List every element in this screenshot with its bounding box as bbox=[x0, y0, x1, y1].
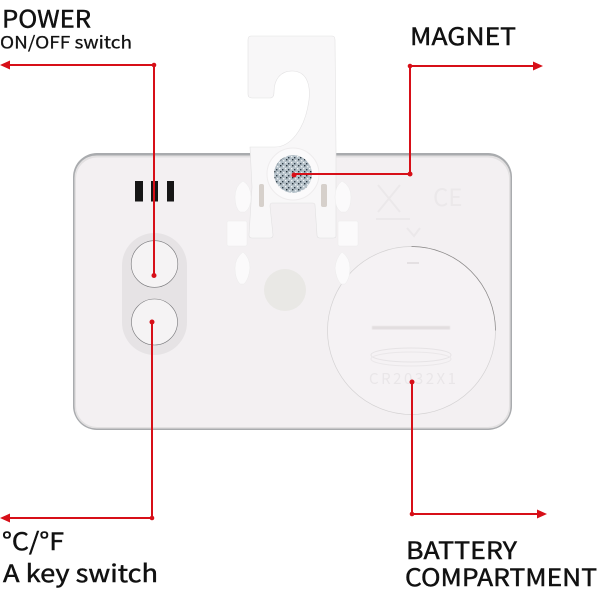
regulatory marks bbox=[376, 178, 462, 236]
regulatory marks: CE bbox=[433, 178, 462, 213]
callout: power bbox=[0, 60, 156, 278]
round window bbox=[264, 269, 306, 311]
callout: magnet bbox=[292, 62, 543, 178]
label: degrees: °C/°F bbox=[2, 522, 64, 557]
magnet bbox=[267, 148, 319, 200]
device body bbox=[73, 153, 512, 430]
label: battery: BATTERY bbox=[406, 531, 517, 566]
callout: unit switch bbox=[0, 320, 154, 522]
callout: battery bbox=[410, 380, 547, 518]
hinge clips bbox=[227, 181, 358, 284]
label: on/off switch: ON/OFF switch bbox=[0, 28, 132, 54]
label: key switch: A key switch bbox=[3, 554, 158, 589]
vent slots bbox=[135, 181, 174, 202]
label: magnet: MAGNET bbox=[410, 17, 516, 52]
label: compartment: COMPARTMENT bbox=[405, 558, 597, 593]
hook bracket bbox=[248, 36, 336, 238]
power button bbox=[131, 241, 178, 287]
label: power: POWER bbox=[2, 0, 91, 34]
unit button bbox=[132, 299, 178, 345]
battery cover: CR2032X1 bbox=[369, 368, 456, 389]
battery cover bbox=[328, 246, 496, 414]
button recess bbox=[122, 233, 187, 355]
